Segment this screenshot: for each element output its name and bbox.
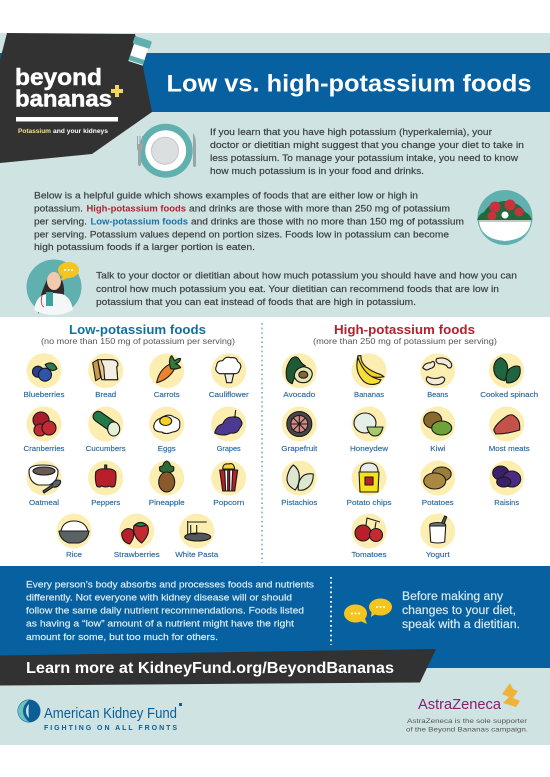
food: tomatoes xyxy=(352,514,387,559)
text block: guide explanation: and drinks are those with no more than 150 mg of potassium xyxy=(191,216,464,226)
text block: guide explanation: per serving. xyxy=(34,216,87,226)
subtitle: potassium and your kidneys: Potassium xyxy=(18,128,51,135)
food: pineapple xyxy=(149,460,185,507)
food: raisins xyxy=(489,460,524,507)
food: most meats xyxy=(489,406,530,453)
food: potatoes xyxy=(420,460,455,507)
logo: AstraZeneca: AstraZeneca xyxy=(418,696,502,713)
logo: AstraZeneca xyxy=(418,683,520,713)
panel: high-potassium foods xyxy=(281,322,538,559)
banner: learn more: Learn more at KidneyFund.org/BeyondBananas xyxy=(26,660,394,677)
icon: pill bottle xyxy=(127,36,152,66)
food: cooked spinach: Cooked spinach xyxy=(480,390,538,399)
text block: sponsor note: AstraZeneca is the sole supporter xyxy=(407,718,528,725)
food: oatmeal xyxy=(26,460,62,507)
logo: beyond bananas xyxy=(15,64,123,122)
food: bananas: Bananas xyxy=(354,390,384,399)
text block: intro: less potassium. To manage your potassium intake, you need to know xyxy=(210,153,518,163)
food: strawberries: Strawberries xyxy=(114,550,160,559)
panel: foods background xyxy=(0,317,550,566)
food: popcorn xyxy=(211,460,246,507)
logo: American Kidney Fund: American Kidney Fund xyxy=(44,706,177,722)
logo: American Kidney Fund: FIGHTING ON ALL FRONTS xyxy=(44,725,177,732)
food: yogurt: Yogurt xyxy=(426,550,450,559)
food: potato chips xyxy=(346,460,392,507)
food: avocado xyxy=(282,353,317,399)
banner: learn more xyxy=(0,649,436,686)
food: blueberries: Blueberries xyxy=(24,390,65,399)
food: bread: Bread xyxy=(95,390,116,399)
food: white pasta: White Pasta xyxy=(175,550,219,559)
callout: speak with a dietitian: changes to your diet, xyxy=(402,605,516,617)
food: pistachios xyxy=(281,460,318,507)
text block: talk to your doctor: potassium that you can eat instead of foods that are high in potassium. xyxy=(96,297,416,307)
food: white pasta xyxy=(175,514,219,559)
icon: chat bubbles xyxy=(344,598,392,624)
food: most meats: Most meats xyxy=(489,444,530,453)
food: cranberries: Cranberries xyxy=(24,444,65,453)
text block: every person: Every person’s body absorbs and processes foods and nutrients xyxy=(26,580,314,590)
food: grapes: Grapes xyxy=(217,444,241,453)
icon: salad bowl xyxy=(477,190,532,245)
food: pistachios: Pistachios xyxy=(281,498,318,507)
logo: American Kidney Fund xyxy=(18,700,182,732)
food: carrots xyxy=(149,353,184,399)
food: beans: Beans xyxy=(427,390,448,399)
subheading: low-potassium: (no more than 150 mg of potassium per serving) xyxy=(41,337,235,346)
text block: talk to your doctor: control how much potassium you eat. Your dietitian can recommend foods that are low in xyxy=(96,284,499,294)
food: oatmeal: Oatmeal xyxy=(29,498,59,507)
food: peppers xyxy=(88,460,123,507)
food: honeydew xyxy=(350,406,389,453)
text block: every person: follow the same daily nutrient recommendations. Foods listed xyxy=(26,606,304,616)
food: beans xyxy=(420,353,455,399)
panel: bottom blue xyxy=(0,566,550,668)
text block: every person: as having a “low” amount of a nutrient might have the right xyxy=(26,618,294,628)
text block: intro: If you learn that you have high potassium (hyperkalemia), your xyxy=(210,127,492,137)
text block: every person xyxy=(26,580,314,642)
panel: low-potassium foods xyxy=(24,322,249,559)
text block: guide explanation: potassium. xyxy=(34,204,83,214)
food: pineapple: Pineapple xyxy=(149,498,185,507)
food: eggs: Eggs xyxy=(158,444,176,453)
text block: guide explanation: per serving. Potassium values depend on portion sizes. Foods low in potassium can become xyxy=(34,230,449,240)
subheading: high-potassium: (more than 250 mg of potassium per serving) xyxy=(313,337,497,346)
divider: callout xyxy=(330,577,332,645)
callout: speak with a dietitian: Before making any xyxy=(402,591,503,603)
food: honeydew: Honeydew xyxy=(350,444,389,453)
food: raisins: Raisins xyxy=(494,498,520,507)
icon: plate with fork and knife xyxy=(137,124,196,178)
food: popcorn: Popcorn xyxy=(213,498,244,507)
food: yogurt xyxy=(420,514,455,559)
food: grapes xyxy=(211,406,246,453)
text block: guide explanation xyxy=(34,190,464,252)
icon: doctor xyxy=(26,260,82,315)
text block: sponsor note: of the Beyond Bananas campaign. xyxy=(406,726,528,734)
header dark badge xyxy=(0,33,152,163)
text block: intro xyxy=(210,127,524,176)
callout: speak with a dietitian: speak with a dietitian. xyxy=(402,619,520,631)
subtitle: potassium and your kidneys xyxy=(18,128,108,135)
food: cauliflower xyxy=(209,353,249,399)
text block: guide explanation: Below is a helpful guide which shows examples of foods that are either low or high in xyxy=(34,190,418,200)
food: cauliflower: Cauliflower xyxy=(209,390,249,399)
food: kiwi xyxy=(420,406,455,453)
logo: beyond bananas: beyond xyxy=(15,64,102,90)
food: grapefruit xyxy=(281,406,317,453)
food: potatoes: Potatoes xyxy=(422,498,454,507)
text block: intro: how much potassium is in your food and drinks. xyxy=(210,166,424,176)
title: Low vs. high-potassium foods xyxy=(166,70,532,98)
callout: speak with a dietitian xyxy=(402,591,520,631)
food: peppers: Peppers xyxy=(91,498,121,507)
food: blueberries xyxy=(24,353,65,399)
heading: low-potassium foods: Low-potassium foods xyxy=(69,322,206,337)
heading: high-potassium foods: High-potassium foods xyxy=(334,322,475,337)
text block: every person: differently. Not everyone with kidney disease will or should xyxy=(26,592,292,602)
food: avocado: Avocado xyxy=(283,390,315,399)
subtitle: potassium and your kidneys: and your kidneys xyxy=(53,128,108,135)
divider: foods columns xyxy=(261,323,263,563)
food: cucumbers: Cucumbers xyxy=(86,444,126,453)
text block: sponsor note xyxy=(406,718,528,734)
text block: guide explanation: and drinks are those with more than 250 mg of potassium xyxy=(189,204,450,214)
logo: beyond bananas: bananas xyxy=(15,86,112,112)
food: rice xyxy=(56,514,92,559)
text block: every person: amount for some, but too much for others. xyxy=(26,632,218,642)
text block: talk to your doctor: Talk to your doctor or dietitian about how much potassium you should have and how you can xyxy=(96,270,517,280)
text block: guide explanation: Low-potassium foods xyxy=(90,216,188,226)
text block: guide explanation: High-potassium foods xyxy=(86,204,186,214)
text block: intro: doctor or dietitian might suggest that you change your diet to take in xyxy=(210,140,524,150)
food: potato chips: Potato chips xyxy=(346,498,392,507)
text block: guide explanation: high potassium foods if a larger portion is eaten. xyxy=(34,242,255,252)
food: rice: Rice xyxy=(66,550,82,559)
food: carrots: Carrots xyxy=(154,390,180,399)
header blue band xyxy=(0,53,550,112)
food: bread xyxy=(88,353,123,399)
food: bananas xyxy=(352,353,386,399)
food: tomatoes: Tomatoes xyxy=(352,550,387,559)
food: eggs xyxy=(149,406,184,453)
food: cranberries xyxy=(24,406,65,453)
food: grapefruit: Grapefruit xyxy=(281,444,317,453)
food: kiwi: Kiwi xyxy=(430,444,446,453)
food: cucumbers xyxy=(86,406,126,453)
panel: header xyxy=(0,33,550,163)
text block: talk to your doctor xyxy=(96,270,517,307)
food: cooked spinach xyxy=(480,353,538,399)
food: strawberries xyxy=(114,514,160,559)
